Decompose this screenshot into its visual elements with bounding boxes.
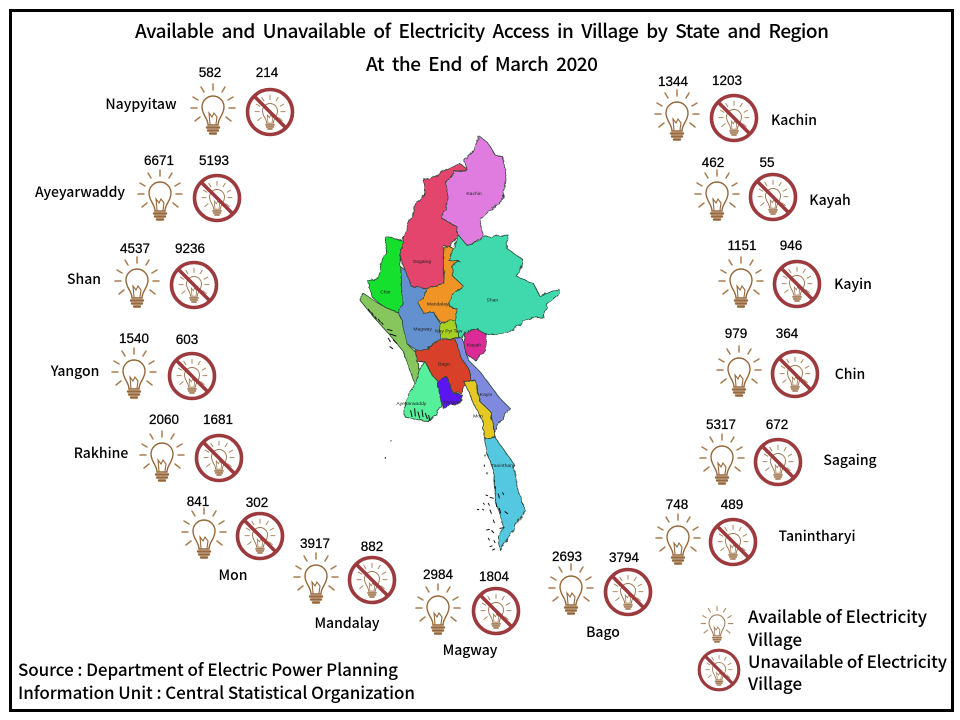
region: Kayah — [695, 155, 851, 220]
region: Kayin: 1151 — [727, 238, 757, 253]
region: Sagaing: 672 — [766, 417, 788, 432]
source note — [18, 656, 415, 704]
region: Kayin — [719, 238, 872, 306]
region: Kayin: 946 — [780, 238, 802, 253]
region: Shan: Shan — [67, 269, 101, 289]
legend icon: unavailable — [699, 650, 739, 690]
legend: Village — [747, 626, 802, 651]
title: Available and Unavailable of Electricity Access in Village by State and Region — [135, 17, 829, 44]
region: Magway — [416, 567, 518, 660]
region: Chin: Chin — [835, 364, 865, 384]
region: Rakhine: 1681 — [203, 412, 233, 427]
region: Tanintharyi: 748 — [666, 497, 688, 512]
region: Mandalay: 882 — [361, 539, 383, 554]
region: Mon: 841 — [187, 494, 209, 509]
region: Tanintharyi — [656, 497, 855, 564]
map region names: Kayah — [467, 343, 481, 349]
region: Mandalay — [294, 536, 394, 633]
map region names: Nay Pyi Taw — [435, 328, 463, 334]
region: Yangon: Yangon — [50, 361, 99, 381]
region: Naypyitaw: Naypyitaw — [105, 94, 177, 114]
map region names: Chin — [380, 289, 391, 295]
region: Yangon — [50, 331, 214, 398]
map islands — [368, 309, 508, 550]
region: Rakhine: Rakhine — [74, 443, 128, 463]
region: Kachin — [655, 73, 817, 140]
region: Tanintharyi: 489 — [721, 497, 743, 512]
title: At the End of March 2020 — [366, 50, 598, 77]
map region names: Yangon — [443, 399, 460, 405]
region: Sagaing: 5317 — [706, 417, 736, 432]
region: Shan — [67, 241, 216, 308]
map of Myanmar — [360, 137, 559, 550]
region: Sagaing — [700, 417, 877, 484]
region: Chin: 364 — [776, 326, 799, 341]
region: Mandalay: 3917 — [300, 536, 330, 551]
region: Bago: Bago — [586, 622, 620, 642]
region: Magway: Magway — [443, 640, 498, 660]
region: Kayah: Kayah — [809, 190, 851, 210]
region: Ayeyarwaddy: Ayeyarwaddy — [35, 182, 125, 202]
region: Mon: Mon — [219, 565, 247, 585]
region: Naypyitaw — [105, 65, 292, 134]
region: Magway: 2984 — [423, 567, 454, 582]
region: Chin — [717, 326, 865, 396]
region: Bago: 2693 — [552, 549, 582, 564]
map region names: Kayin — [480, 392, 492, 398]
region: Sagaing: Sagaing — [823, 450, 877, 470]
region: Mon — [182, 494, 282, 585]
region: Kachin: Kachin — [771, 110, 817, 130]
source note: Information Unit : Central Statistical Organization — [18, 679, 415, 704]
map region names — [380, 191, 515, 469]
map region names: Kachin — [466, 191, 482, 197]
region: Bago — [549, 549, 650, 642]
legend icon: available — [701, 606, 733, 642]
region: Ayeyarwaddy: 5193 — [199, 153, 229, 168]
region: Tanintharyi: Tanintharyi — [779, 526, 855, 546]
legend text: available: Available of Electricity — [748, 603, 928, 628]
source note: Source : Department of Electric Power Planning — [18, 656, 398, 681]
map region names: Tanintharyi — [491, 463, 515, 469]
map region names: Shan — [487, 298, 498, 304]
region: Chin: 979 — [725, 326, 747, 341]
region: Mandalay: Mandalay — [314, 613, 380, 633]
title — [135, 17, 829, 77]
region: Naypyitaw: 582 — [199, 65, 221, 80]
map region names: Mon — [473, 413, 483, 419]
region: Kayin: Kayin — [834, 274, 872, 294]
region: Kayah: 462 — [702, 155, 724, 170]
legend — [699, 603, 948, 695]
map region names: Mandalay — [427, 302, 449, 308]
region: Kachin: 1344 — [658, 74, 689, 89]
region: Kayah: 55 — [759, 155, 775, 170]
region: Kachin: 1203 — [712, 73, 742, 88]
region: Rakhine — [74, 412, 242, 480]
region: Shan: 4537 — [120, 241, 150, 256]
region: Mon: 302 — [246, 495, 268, 510]
map region names: Sagaing — [413, 259, 431, 265]
map region names: Magway — [413, 327, 432, 333]
region: Magway: 1804 — [479, 569, 510, 584]
region: Yangon: 603 — [176, 332, 198, 347]
region: Ayeyarwaddy: 6671 — [144, 153, 174, 168]
legend text: unavailable: Unavailable of Electricity — [748, 648, 948, 673]
map region names: Bago — [438, 361, 450, 367]
region: Yangon: 1540 — [119, 331, 149, 346]
region: Shan: 9236 — [175, 241, 205, 256]
region: Naypyitaw: 214 — [256, 65, 279, 80]
region: Bago: 3794 — [609, 550, 640, 565]
region: Ayeyarwaddy — [35, 153, 240, 220]
map region names: Ayeyarwaddy — [396, 401, 427, 407]
legend: Village — [747, 670, 802, 695]
region: Rakhine: 2060 — [149, 412, 179, 427]
